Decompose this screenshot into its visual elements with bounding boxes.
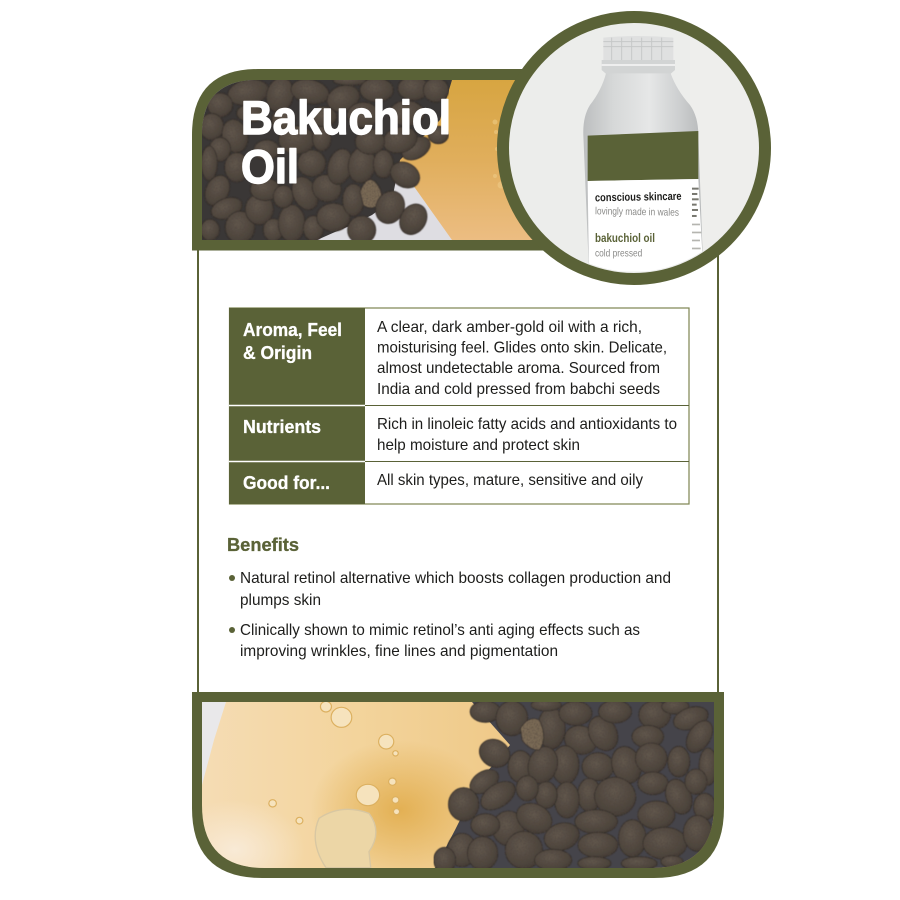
table bbox=[229, 308, 689, 504]
table header column bbox=[229, 308, 365, 504]
row: nutrients: help moisture and protect skin bbox=[377, 437, 580, 454]
benefits list: plumps skin bbox=[240, 592, 321, 609]
row: nutrients: Rich in linoleic fatty acids and antioxidants to bbox=[377, 416, 677, 433]
row: aroma, feel and origin: Aroma, Feel bbox=[243, 320, 342, 340]
label text: conscious skincare bbox=[595, 191, 682, 204]
row: aroma, feel and origin: India and cold pressed from babchi seeds bbox=[377, 381, 660, 398]
label text: cold pressed bbox=[595, 248, 642, 259]
clear oil droplet bbox=[315, 809, 376, 868]
title: Bakuchiol bbox=[241, 91, 451, 144]
panel: bottom photo banner with oil and seeds bbox=[192, 692, 724, 878]
row: good for bbox=[243, 472, 643, 493]
row: good for: Good for... bbox=[243, 473, 330, 493]
row: aroma, feel and origin: A clear, dark amber-gold oil with a rich, bbox=[377, 319, 642, 336]
row: good for: All skin types, mature, sensitive and oily bbox=[377, 472, 643, 489]
benefits list bbox=[229, 570, 671, 660]
oil bubbles bbox=[269, 701, 400, 824]
title: Oil bbox=[241, 140, 299, 193]
label text: bakuchiol oil bbox=[595, 232, 655, 245]
bottle body bbox=[583, 73, 703, 272]
benefits list: Clinically shown to mimic retinol’s anti aging effects such as bbox=[240, 622, 640, 639]
row: aroma, feel and origin: & Origin bbox=[243, 343, 312, 363]
white label bbox=[588, 179, 703, 272]
benefits list: Natural retinol alternative which boosts collagen production and bbox=[240, 570, 671, 587]
row: aroma, feel and origin: moisturising feel. Glides onto skin. Delicate, bbox=[377, 340, 667, 356]
row: nutrients: Nutrients bbox=[243, 417, 321, 437]
label text bbox=[595, 191, 682, 259]
circular bottle photo bbox=[503, 10, 780, 290]
bottle cap bbox=[602, 36, 675, 74]
row: aroma, feel and origin bbox=[243, 319, 667, 398]
row: nutrients bbox=[243, 416, 677, 454]
title bbox=[241, 91, 451, 193]
heading: benefits: Benefits bbox=[227, 534, 299, 555]
row: aroma, feel and origin: almost undetectable aroma. Sourced from bbox=[377, 360, 660, 377]
benefits list: improving wrinkles, fine lines and pigmentation bbox=[240, 643, 558, 660]
olive label band bbox=[588, 131, 698, 181]
panel: side rules of the middle content area bbox=[197, 250, 719, 692]
panel: top photo banner with seeds and oil bbox=[192, 69, 562, 250]
label text: lovingly made in wales bbox=[595, 206, 679, 219]
